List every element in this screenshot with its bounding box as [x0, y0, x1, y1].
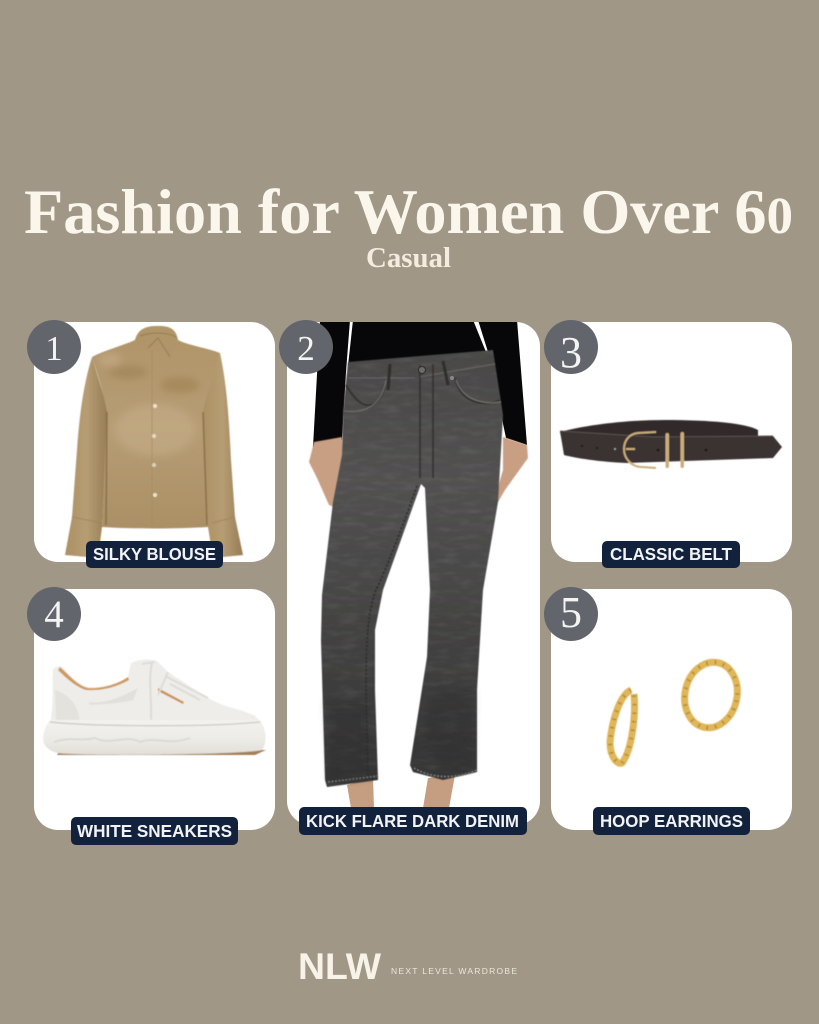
number badge 2: 2 — [297, 329, 315, 368]
illustration: belt — [560, 420, 782, 468]
footer logo — [298, 946, 517, 987]
jeans details — [328, 361, 501, 782]
logo mark: NLW: NLW — [298, 946, 381, 987]
number badge 4: 4 — [44, 593, 64, 636]
card 3 — [551, 322, 792, 562]
card 1 — [34, 322, 275, 562]
label: white sneakers — [71, 817, 238, 845]
card 5 — [551, 589, 792, 830]
denim texture — [322, 360, 490, 786]
illustration: model in jeans — [309, 320, 528, 808]
panel: silky blouse — [27, 320, 275, 568]
illustration: earrings — [610, 657, 743, 763]
jeans — [321, 350, 503, 787]
card 2 — [287, 322, 540, 825]
hands — [309, 437, 528, 507]
label: silky blouse — [86, 541, 223, 568]
skin: ankles — [347, 775, 455, 808]
black top — [313, 320, 527, 447]
number badge 1 — [27, 320, 81, 374]
illustration: sneaker — [43, 660, 266, 755]
label: kick flare dark denim: KICK FLARE DARK DENIM — [306, 811, 519, 831]
label: silky blouse: SILKY BLOUSE — [93, 544, 216, 564]
label: hoop earrings: HOOP EARRINGS — [600, 811, 743, 831]
label: classic belt: CLASSIC BELT — [610, 544, 732, 564]
number badge 3: 3 — [560, 328, 582, 377]
number badge 5 — [544, 587, 598, 641]
shading on lower legs — [326, 690, 474, 780]
panel: white sneakers — [27, 587, 275, 845]
card 4 — [34, 589, 275, 830]
title: Fashion for Women Over 6 0 — [24, 177, 793, 247]
number badge 1: 1 — [45, 329, 63, 368]
subtitle: Casual — [366, 243, 451, 274]
panel: kick flare dark denim — [279, 320, 540, 835]
label: classic belt — [602, 541, 740, 568]
number badge 3 — [544, 320, 598, 377]
logo tagline: NEXT LEVEL WARDROBE — [391, 966, 517, 976]
number badge 2 — [279, 320, 333, 374]
illustration: blouse — [65, 326, 243, 558]
number badge 5: 5 — [560, 588, 582, 637]
number badge 4 — [27, 587, 81, 641]
label: white sneakers: WHITE SNEAKERS — [77, 821, 232, 841]
label: kick flare dark denim — [299, 807, 527, 835]
panel: classic belt — [544, 320, 792, 568]
label: hoop earrings — [593, 807, 750, 835]
panel: hoop earrings — [544, 587, 792, 835]
